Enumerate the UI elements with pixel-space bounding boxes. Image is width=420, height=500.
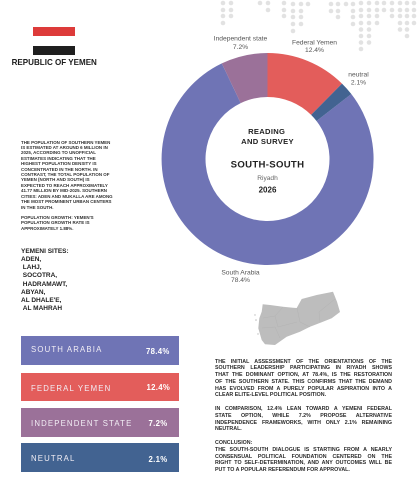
text block: comparison <box>215 406 392 432</box>
text block: population: THE MOST PROMINENT URBAN CENTERS <box>21 199 111 204</box>
text block: initial assessment: THAT THE DOMINANT OPTION, AT 78.4%, IS THE RESTORATION <box>215 372 392 378</box>
text block: population: IN THE SOUTH. <box>21 205 54 210</box>
text block: comparison: NEUTRAL. <box>215 426 242 432</box>
label: Independent state: 7.2% <box>233 44 248 51</box>
label: Federal Yemen: Federal Yemen <box>292 40 337 46</box>
icon: flag of Yemen <box>33 27 75 55</box>
text block: conclusion: THE SOUTH-SOUTH DIALOGUE IS STARTING FROM A NEARLY <box>215 447 392 453</box>
label: neutral: neutral <box>348 72 369 78</box>
segment: neutral 2.1% <box>311 84 351 121</box>
legend bar: Neutral: 2.1% <box>148 454 167 464</box>
text block: Yemeni sites: HADRAMAWT, <box>23 280 67 288</box>
text block: population: HIGHEST POPULATION DENSITY IS <box>21 161 97 166</box>
text block: Yemeni sites <box>21 248 69 312</box>
donut centre heading: AND SURVEY <box>241 137 294 146</box>
text block: population growth: APPROXIMATELY 1.88%. <box>21 226 73 231</box>
text block: population: CITIES: ADEN AND MUKALLA ARE AMONG <box>21 194 113 199</box>
text block: initial assessment: THE INITIAL ASSESSMENT OF THE ORIENTATIONS OF THE <box>215 358 392 364</box>
text block: initial assessment: HAS EVOLVED FROM A PURELY POPULAR ASPIRATION INTO A <box>215 386 392 392</box>
text block: initial assessment: OF THE SOUTHERN STATE. THIS CONFIRMS THAT THE DEMAND <box>215 379 392 385</box>
text block: population: THE POPULATION OF SOUTHERN YEMEN <box>21 140 110 144</box>
text block: population <box>21 140 113 210</box>
text block: population growth: POPULATION GROWTH: YEMEN'S <box>21 215 94 220</box>
text block: population: CONTRAST, THE TOTAL POPULATION OF <box>21 172 109 177</box>
text block: conclusion: PUT TO A POPULAR REFERENDUM FOR APPROVAL. <box>215 467 350 473</box>
legend bar: Federal Yemen <box>20 373 179 401</box>
text block: population: IS ESTIMATED AT AROUND 6 MILLION IN <box>21 145 108 150</box>
segment: Independent state 7.2% <box>222 53 268 103</box>
text block: population growth <box>21 215 94 231</box>
text block: population: YEMEN (NORTH AND SOUTH) IS <box>21 177 90 182</box>
legend bar: Neutral <box>20 443 179 472</box>
text block: comparison: IN COMPARISON, 12.4% LEAN TOWARD A YEMENI FEDERAL <box>215 406 392 412</box>
label: Federal Yemen: 12.4% <box>305 47 324 54</box>
legend bar: Federal Yemen: 12.4% <box>146 383 170 392</box>
label: neutral: 2.1% <box>351 80 366 86</box>
label: South Arabia <box>221 270 260 284</box>
label: Independent state: Independent state <box>214 36 268 42</box>
legend bar: South Arabia: 78.4% <box>146 347 170 356</box>
segment: Federal Yemen 12.4% <box>268 53 342 115</box>
label: South Arabia: 78.4% <box>231 277 250 284</box>
text block: initial assessment: CLEAR ELITE-LEVEL POLITICAL POSITION. <box>215 392 326 398</box>
label: Federal Yemen <box>292 40 337 54</box>
donut centre heading: 2026 <box>259 186 277 194</box>
text block: population: EXPECTED TO REACH APPROXIMATELY <box>21 183 108 188</box>
text block: population: CONCENTRATED IN THE NORTH. IN <box>21 167 98 172</box>
text block: conclusion: CONCLUSION: <box>215 440 252 446</box>
label: Independent state <box>214 36 268 51</box>
text block: comparison: INDEPENDENCE FRAMEWORKS, WITH ONLY 2.1% REMAINING <box>215 420 392 426</box>
donut centre heading: SOUTH-SOUTH <box>231 160 304 170</box>
donut centre heading: Riyadh <box>257 175 278 182</box>
legend bar: South Arabia: SOUTH ARABIA <box>31 345 102 354</box>
legend bar: Federal Yemen: FEDERAL YEMEN <box>31 384 111 393</box>
text block: Yemeni sites: YEMENI SITES: <box>21 248 69 255</box>
text block: comparison: STATE OPTION, WHILE 7.2% PROPOSE ALTERNATIVE <box>215 413 392 419</box>
text block: conclusion: RIGHT TO SELF-DETERMINATION, AND ANY OUTCOMES WILL BE <box>215 460 392 466</box>
text block: initial assessment: SOUTHERN LEADERSHIP PARTICIPATING IN RIYADH SHOWS <box>215 365 392 371</box>
text block: population growth: POPULATION GROWTH RATE IS <box>21 220 90 225</box>
donut centre heading <box>231 127 304 194</box>
text block: Yemeni sites: ADEN, <box>21 256 41 263</box>
legend bar: Independent state: 7.2% <box>148 419 167 428</box>
text block: Yemeni sites: SOCOTRA, <box>23 272 57 279</box>
legend bar: South Arabia <box>20 336 179 365</box>
label: South Arabia: South Arabia <box>221 270 260 276</box>
text block: Yemeni sites: LAHJ, <box>23 264 42 271</box>
text block: conclusion: CONSENSUAL POLITICAL FOUNDATION CENTERED ON THE <box>215 454 392 460</box>
label: neutral <box>348 72 369 86</box>
text block: population: 2025, ACCORDING TO UNOFFICIAL <box>21 150 96 155</box>
dotted world map <box>221 1 416 51</box>
text block: Yemeni sites: AL DHALE'E, <box>21 297 61 304</box>
text block: Yemeni sites: AL MAHRAH <box>23 305 62 312</box>
map of Yemen <box>254 292 340 345</box>
legend bar: Independent state <box>20 408 179 437</box>
legend bar: Independent state: INDEPENDENT STATE <box>31 419 132 428</box>
donut centre heading: READING <box>248 127 285 136</box>
title: Republic of Yemen: REPUBLIC OF YEMEN <box>12 58 97 66</box>
text block: initial assessment <box>215 358 392 398</box>
text block: Yemeni sites: ABYAN, <box>21 289 45 296</box>
text block: conclusion <box>215 440 392 473</box>
text block: population: 41.77 MILLION BY MID-2025. SOUTHERN <box>21 188 107 193</box>
text block: population: ESTIMATES INDICATING THAT THE <box>21 156 96 161</box>
legend bar: Neutral: NEUTRAL <box>31 454 75 462</box>
segment: South Arabia 78.4% <box>162 63 374 265</box>
